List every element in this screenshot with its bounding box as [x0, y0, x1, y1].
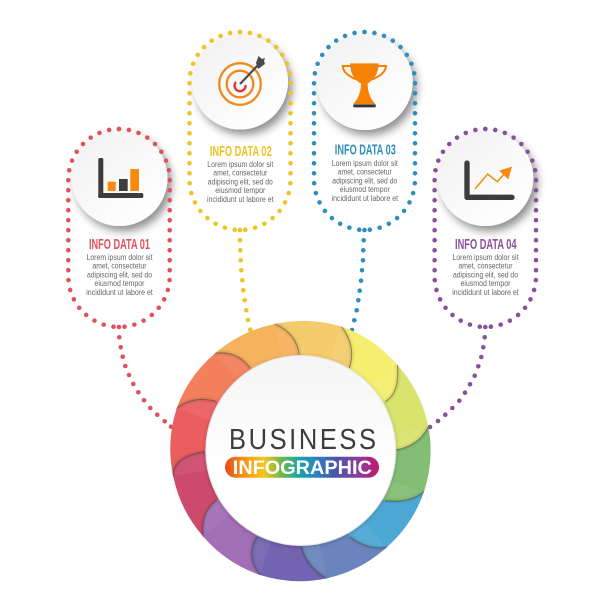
body text 04: incididunt ut labore et [452, 288, 519, 297]
petal: orange red [177, 353, 300, 451]
panel: info data 01 [68, 129, 170, 329]
body text 02: adipiscing elit, sed do [208, 177, 273, 186]
icon: trophy [343, 63, 386, 107]
dotted outline 02 [190, 32, 290, 230]
body text 02: incididunt ut labore et [207, 195, 274, 204]
body text 01: incididunt ut labore et [86, 288, 153, 297]
body text 03: adipiscing elit, sed do [332, 176, 398, 185]
panel: info data 03 [314, 32, 415, 232]
body text 01: amet, consectetur [92, 262, 147, 271]
body text 02 [207, 160, 274, 204]
heading 03: INFO DATA 03 [335, 142, 396, 158]
body text 04: eiusmod tempor [460, 279, 511, 288]
petal: orange [215, 324, 300, 451]
petal: crimson [173, 451, 300, 537]
body text 01 [86, 253, 153, 297]
connector: 02 to wheel [238, 238, 253, 332]
connector: 01 to wheel [117, 335, 173, 429]
body text 04: adipiscing elit, sed do [453, 270, 519, 279]
body text 04 [452, 253, 519, 297]
petal: steel blue [300, 451, 387, 578]
petal edge lines [173, 324, 428, 578]
body text 01: Lorem ipsum dolor sit [86, 253, 153, 262]
petal: yellow green [300, 365, 428, 451]
body text 04: Lorem ipsum dolor sit [452, 253, 519, 262]
dotted outline 04 [435, 129, 536, 327]
petal: green [300, 427, 431, 501]
body text 03 [332, 159, 399, 203]
colour wheel [170, 321, 431, 581]
body text 03: eiusmod tempor [340, 185, 390, 194]
petal: violet [252, 451, 327, 581]
circle badge 04 [437, 130, 533, 226]
petal: yellow [300, 327, 398, 451]
petal: blue [300, 451, 424, 548]
body text 04: amet, consectetur [458, 262, 513, 271]
icon: rising line chart [467, 163, 512, 197]
icon: target with arrow [219, 56, 265, 105]
body text 03: Lorem ipsum dolor sit [332, 159, 399, 168]
circle badge 02 [192, 34, 288, 130]
body text 02: amet, consectetur [213, 169, 268, 178]
body text 03: incididunt ut labore et [332, 194, 399, 203]
icon: bar chart [98, 158, 143, 198]
dotted outline 03 [314, 32, 415, 230]
circle badge 03 [317, 34, 413, 130]
heading 04: INFO DATA 04 [455, 236, 517, 253]
title: business: BUSINESS [229, 422, 376, 455]
petal edge soft shadows [173, 324, 428, 578]
heading 02: INFO DATA 02 [210, 143, 272, 160]
petal: purple [203, 451, 300, 575]
petal: light orange [275, 321, 352, 451]
circle badge 01 [72, 130, 168, 226]
heading 01: INFO DATA 01 [89, 236, 150, 253]
petal highlights [173, 324, 428, 578]
body text 02: Lorem ipsum dolor sit [207, 160, 274, 169]
connector: 03 to wheel [350, 238, 366, 332]
body text 01: adipiscing elit, sed do [87, 270, 153, 279]
petal: red [170, 399, 300, 477]
body text 01: eiusmod tempor [94, 279, 145, 288]
connector: 04 to wheel [428, 335, 487, 429]
title badge: infographic: INFOGRAPHIC [233, 457, 372, 479]
dotted outline 01 [68, 129, 170, 327]
center disc [206, 356, 396, 546]
body text 03: amet, consectetur [338, 168, 392, 177]
panel: info data 04 [435, 129, 536, 329]
body text 02: eiusmod tempor [215, 186, 266, 195]
panel: info data 02 [190, 32, 290, 232]
